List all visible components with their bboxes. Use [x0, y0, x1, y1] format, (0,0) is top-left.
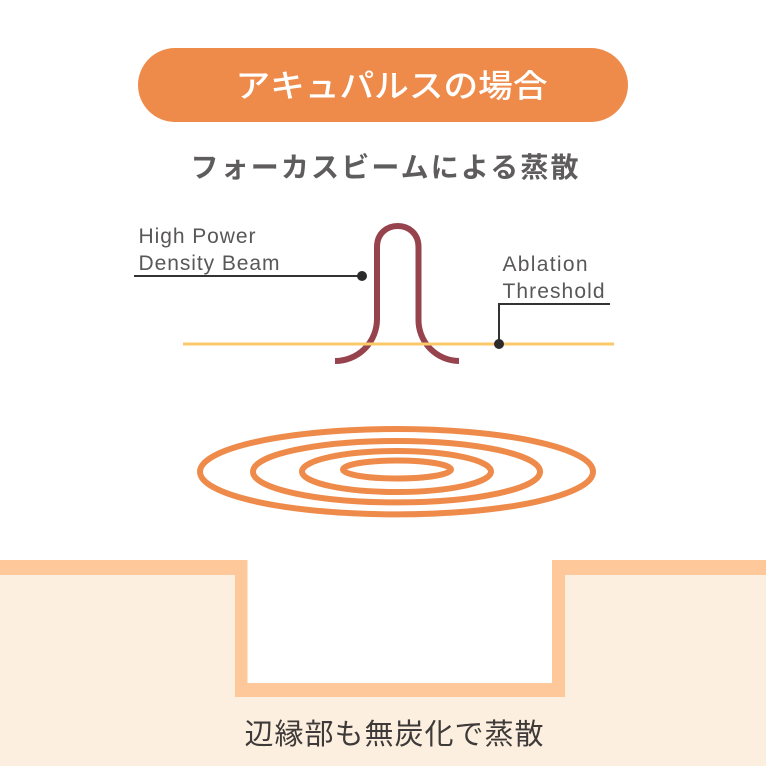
label: ablation threshold [494, 253, 610, 349]
caption: 辺縁部も無炭化で蒸散 [244, 711, 544, 753]
title pill [138, 48, 628, 122]
subtitle: フォーカスビームによる蒸散 [190, 146, 578, 186]
label: high power density beam: High Power [138, 225, 256, 248]
concentric rings [200, 429, 593, 514]
label: high power density beam [134, 225, 367, 281]
ablated material cross-section [0, 560, 766, 766]
title pill: アキュパルスの場合 [236, 61, 548, 107]
ablation threshold line [183, 342, 614, 346]
label: high power density beam: Density Beam [138, 252, 280, 275]
label: ablation threshold: Ablation [502, 253, 588, 276]
beam profile curve [335, 226, 459, 361]
label: ablation threshold: Threshold [502, 280, 604, 303]
